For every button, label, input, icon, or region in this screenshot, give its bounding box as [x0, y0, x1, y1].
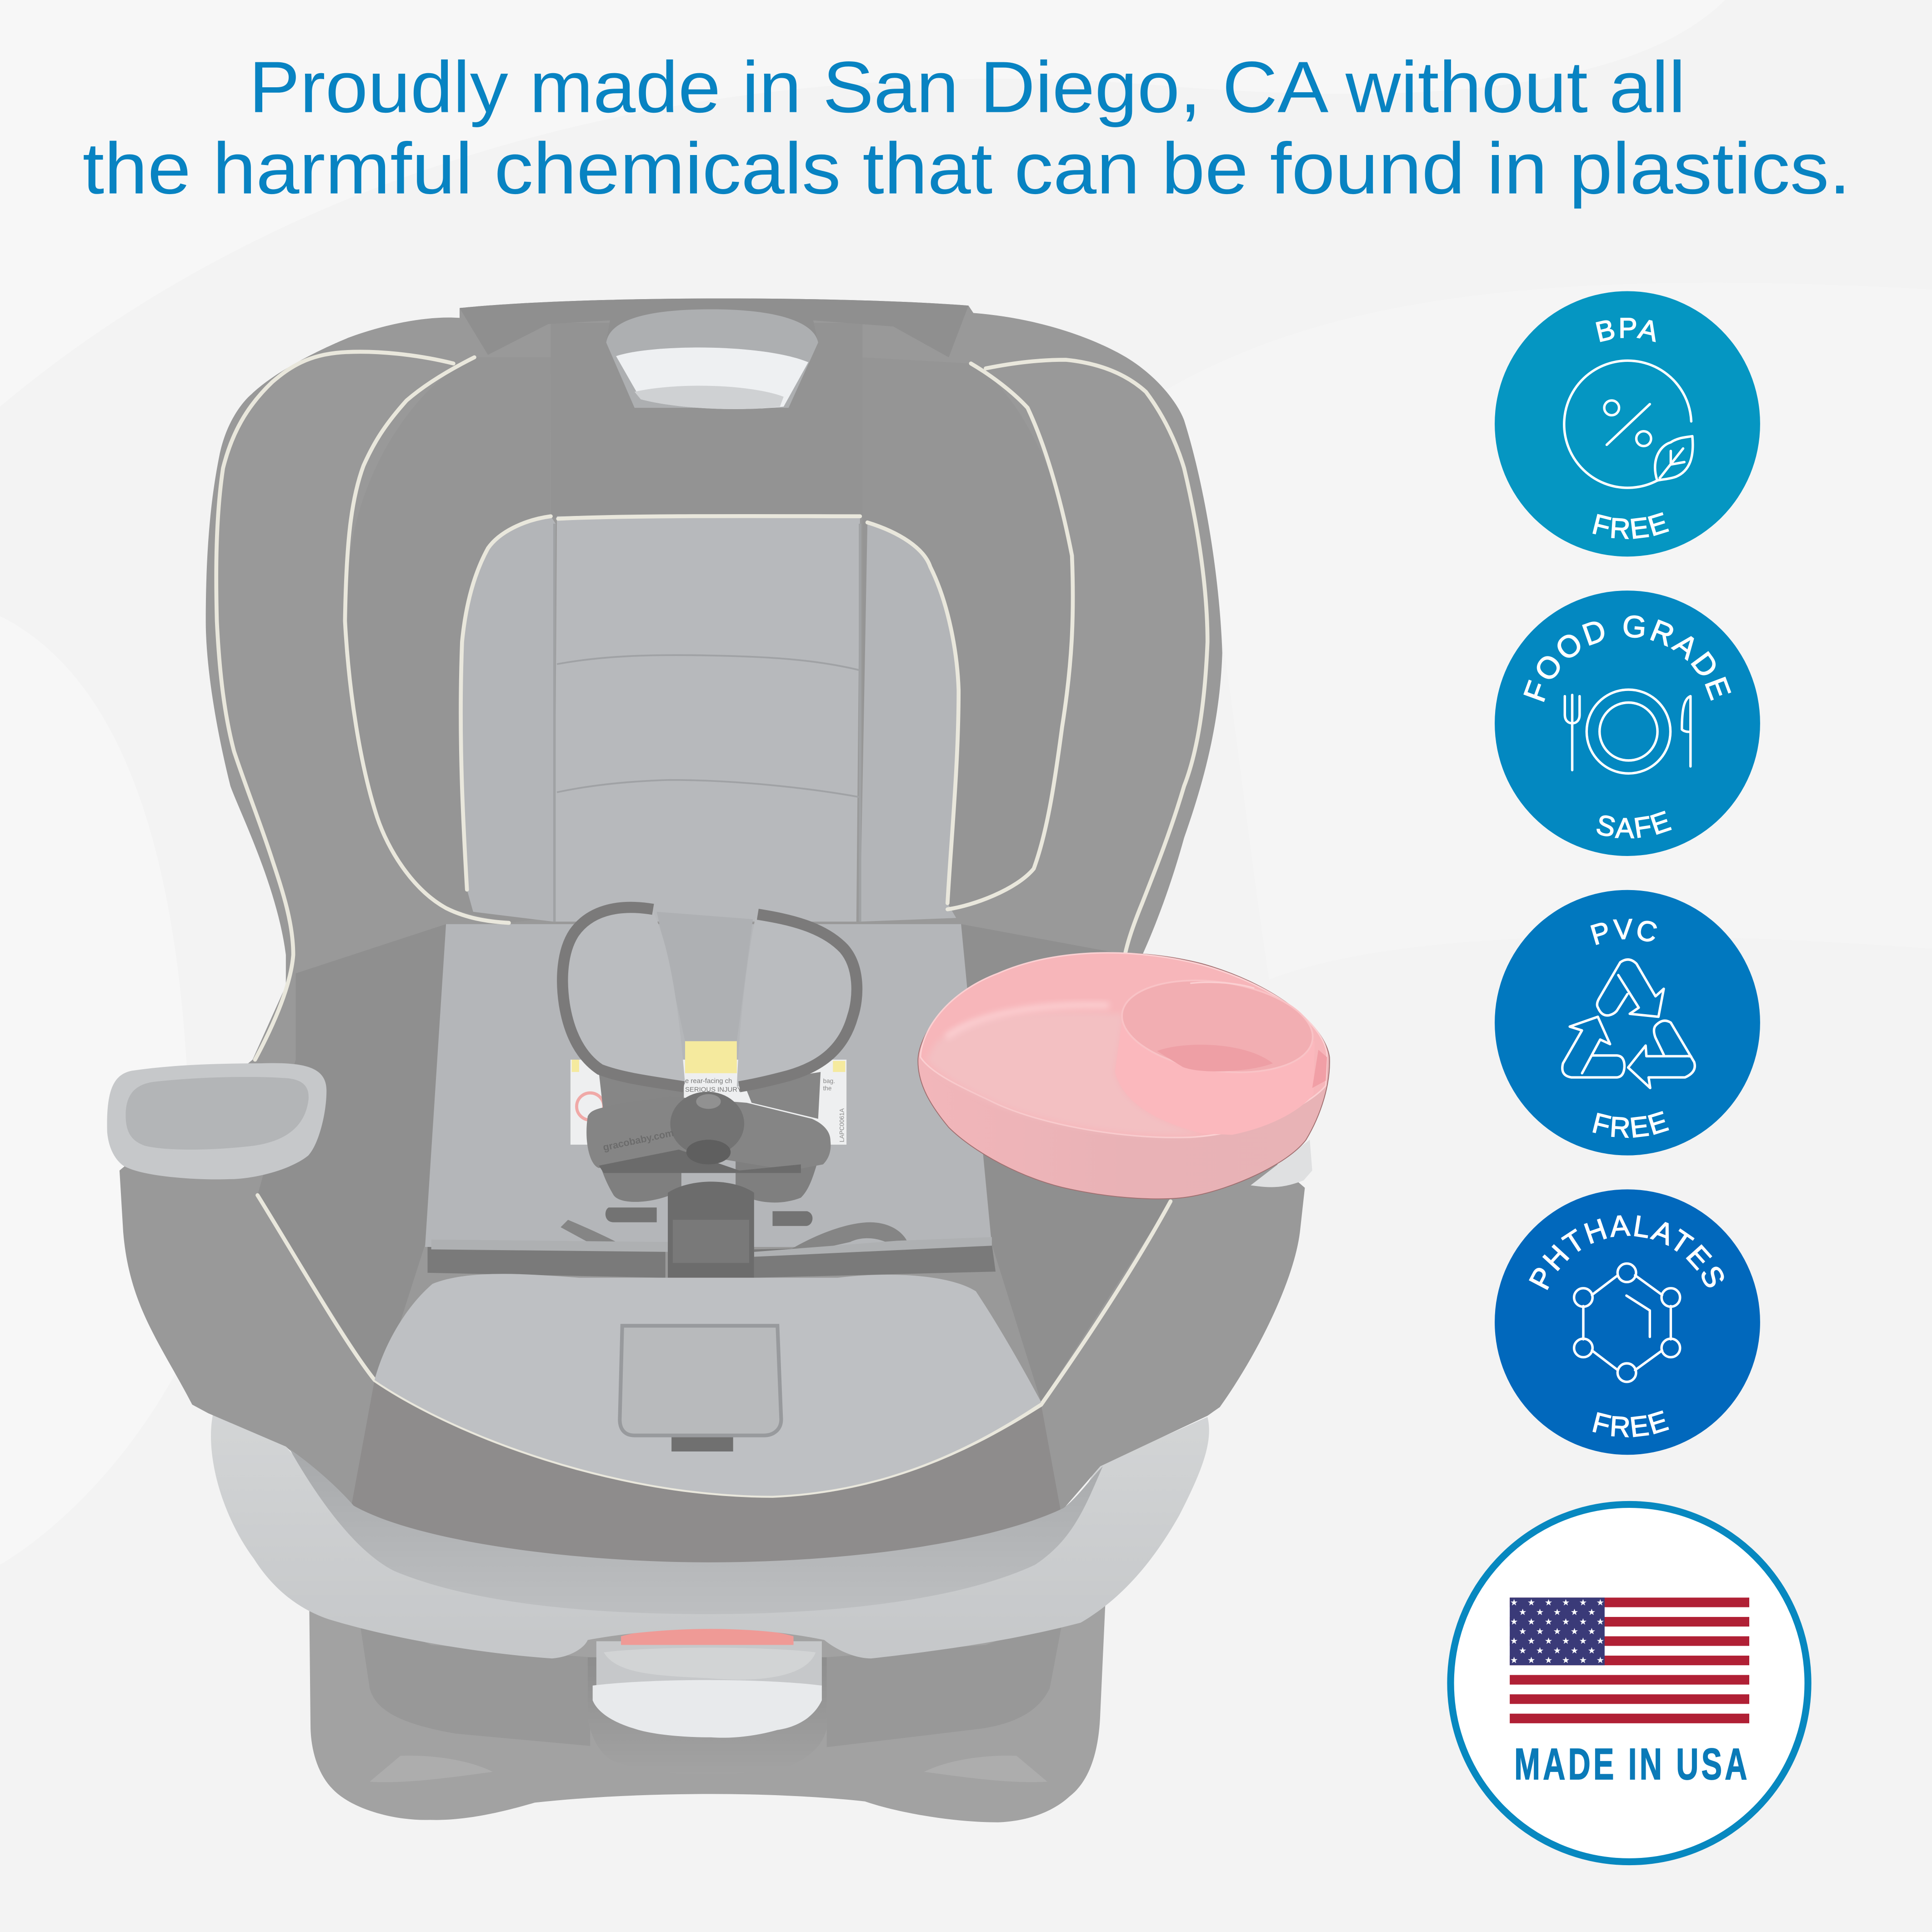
headrest handle: [606, 309, 818, 409]
pink tray: [918, 953, 1330, 1199]
piping: [216, 352, 1207, 1496]
front lip: [290, 1449, 1103, 1614]
badge: food grade safe: [1495, 591, 1760, 856]
icon: plate and cutlery: [1565, 690, 1691, 773]
warning label: LAPC0061A: [839, 1108, 846, 1142]
warning label: SERIOUS INJURY: [685, 1086, 742, 1093]
warning label: bag.: [823, 1077, 835, 1084]
badge: phthalates free: [1495, 1189, 1760, 1455]
left cup holder: [107, 1063, 326, 1179]
inner wells: [257, 924, 1171, 1402]
title: the harmful chemicals that can be found in plastics.: [83, 128, 1851, 209]
badge: PVC free: FREE: [1589, 1105, 1673, 1144]
tray floor: [926, 1012, 1202, 1136]
seat cushion: [375, 1274, 1041, 1496]
warning label: [571, 1039, 846, 1145]
cup wall: [1115, 1018, 1315, 1135]
tray highlight: [946, 1005, 1109, 1037]
badge: PVC free: PVC: [1587, 914, 1662, 951]
badge: PVC free: [1495, 890, 1760, 1156]
lower harness webbing: [598, 1156, 819, 1202]
harness pads: [562, 907, 857, 1087]
badge: made in USA: [1451, 1504, 1808, 1862]
icon: US flag: [1510, 1597, 1749, 1723]
badge: BPA free: [1495, 291, 1760, 556]
warning label: e rear-facing ch: [685, 1077, 732, 1085]
title: [83, 46, 1851, 209]
crotch pad: [620, 1326, 781, 1452]
seat base: [309, 1606, 1105, 1822]
fabric shell: [120, 299, 1305, 1567]
pink latch strip: [621, 1627, 794, 1645]
tray slit: [1312, 1050, 1327, 1088]
lower belts: [428, 1181, 996, 1278]
badge: made in USA: MADE IN USA: [1514, 1739, 1747, 1789]
center harness strap: [657, 912, 753, 1041]
warning label: the: [823, 1085, 831, 1092]
badge: phthalates free: PHTHALATES: [1522, 1209, 1733, 1295]
cup opening: [1116, 969, 1319, 1084]
tray body: [918, 953, 1330, 1199]
tray interior: [921, 953, 1327, 1137]
plastic shell: [211, 1413, 1209, 1658]
rim highlight: [1190, 982, 1254, 988]
icon: molecule: [1574, 1264, 1680, 1382]
badge: food grade safe: SAFE: [1593, 805, 1676, 845]
chest clip: gracobaby.com: [602, 1127, 675, 1153]
badge: food grade safe: FOOD GRADE: [1517, 609, 1738, 706]
fabric seat band: [351, 1380, 1061, 1567]
car seat: [107, 299, 1312, 1822]
pedal: [588, 1641, 827, 1775]
right cup support: [1251, 1140, 1312, 1187]
chest clip: [586, 1091, 831, 1173]
head section: [347, 299, 1072, 923]
badge: BPA free: FREE: [1589, 506, 1673, 545]
title: Proudly made in San Diego, CA without all: [249, 46, 1686, 128]
icon: recycling: [1562, 960, 1695, 1088]
back cushion: [425, 516, 992, 1247]
icon: percent leaf: [1564, 360, 1693, 488]
badge: phthalates free: FREE: [1589, 1405, 1673, 1443]
badge: BPA free: BPA: [1592, 313, 1663, 348]
cup floor: [1157, 1045, 1273, 1071]
harness webbing: [599, 1072, 821, 1119]
